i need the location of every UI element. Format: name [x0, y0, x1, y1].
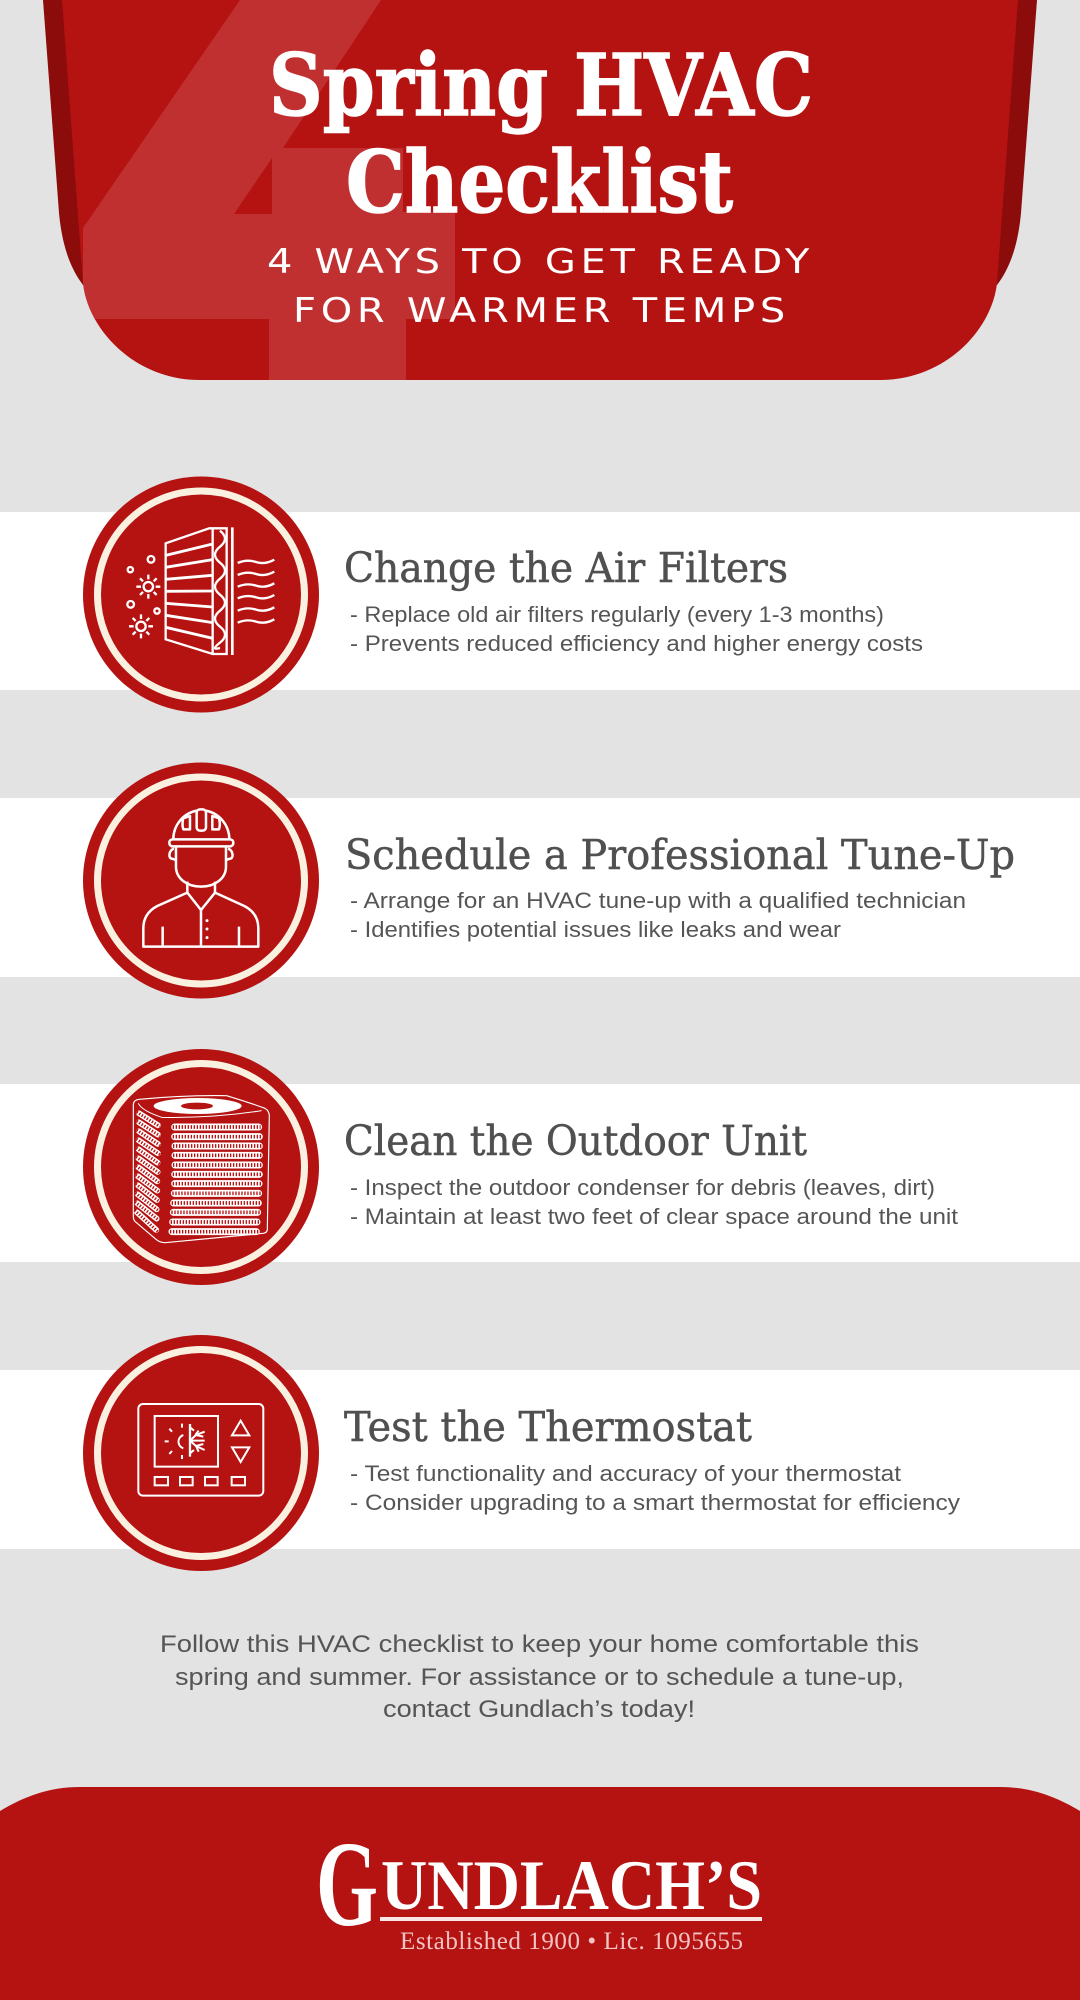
panel: schedule a professional tune-up [0, 762, 1080, 998]
bullet list: - Consider upgrading to a smart thermostat for efficiency [350, 1490, 960, 1515]
closing paragraph [160, 1631, 919, 1723]
bullet list: - Test functionality and accuracy of your thermostat [350, 1461, 901, 1486]
bullet list [350, 602, 923, 656]
heading: Test the Thermostat [344, 1403, 752, 1451]
icon: thermostat [83, 1335, 319, 1571]
footer band [0, 1787, 1080, 2000]
title: Checklist [346, 133, 733, 233]
heading: Schedule a Professional Tune-Up [345, 831, 1015, 879]
icon: outdoor condenser unit [83, 1049, 319, 1285]
bullet list: - Maintain at least two feet of clear space around the unit [350, 1204, 958, 1229]
subtitle: FOR WARMER TEMPS [293, 291, 790, 331]
title: Spring HVAC [269, 36, 813, 136]
logo: Gundlach's: UNDLACH’S [381, 1847, 762, 1925]
icon: technician [83, 762, 319, 998]
bullet list: - Inspect the outdoor condenser for debris (leaves, dirt) [350, 1175, 935, 1200]
panel: change the air filters [0, 476, 1080, 712]
bullet list: - Prevents reduced efficiency and higher energy costs [350, 631, 923, 656]
closing paragraph: spring and summer. For assistance or to schedule a tune-up, [175, 1664, 904, 1691]
subtitle: 4 WAYS TO GET READY [267, 242, 814, 282]
logo: Gundlach's: G [316, 1817, 378, 1952]
bullet list: - Arrange for an HVAC tune-up with a qualified technician [350, 888, 966, 913]
heading: Clean the Outdoor Unit [344, 1117, 807, 1165]
bullet list: - Replace old air filters regularly (every 1-3 months) [350, 602, 884, 627]
icon: air filter [83, 476, 319, 712]
closing paragraph: contact Gundlach’s today! [383, 1696, 695, 1723]
closing paragraph: Follow this HVAC checklist to keep your home comfortable this [160, 1631, 919, 1658]
panel: clean the outdoor unit [0, 1049, 1080, 1285]
logo: Gundlach's [316, 1817, 762, 1955]
subtitle [267, 242, 814, 331]
bullet list [350, 1461, 960, 1515]
bullet list [350, 1175, 958, 1229]
bullet list: - Identifies potential issues like leaks and wear [350, 917, 841, 942]
bullet list [350, 888, 966, 942]
title [269, 36, 813, 233]
logo: Gundlach's: Established 1900 • Lic. 1095655 [400, 1928, 743, 1955]
panel: test the thermostat [0, 1335, 1080, 1571]
header banner [43, 0, 1037, 380]
heading: Change the Air Filters [344, 544, 788, 592]
